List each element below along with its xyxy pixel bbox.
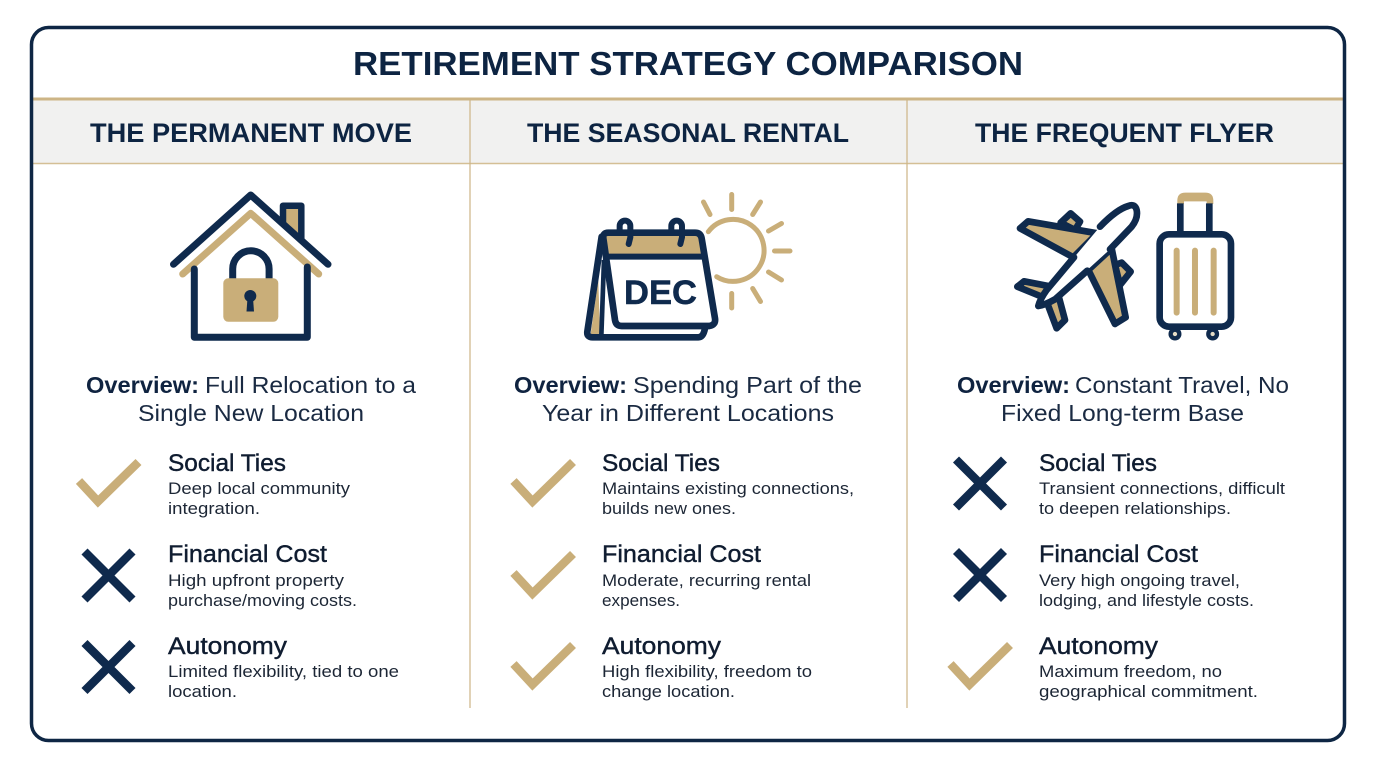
icon: sun bbox=[704, 194, 790, 308]
overview text: Overview: bbox=[86, 372, 199, 398]
column heading: THE FREQUENT FLYER bbox=[975, 118, 1274, 148]
row: financial cost: purchase/moving costs. bbox=[168, 591, 357, 610]
row: social ties: integration. bbox=[168, 499, 260, 518]
panel: the seasonal rental bbox=[514, 118, 862, 701]
row: autonomy: Maximum freedom, no bbox=[1039, 662, 1222, 681]
row: autonomy: High flexibility, freedom to bbox=[602, 662, 812, 681]
row: social ties: to deepen relationships. bbox=[1039, 499, 1231, 518]
overview text: Full Relocation to a bbox=[205, 372, 416, 398]
row: autonomy: Autonomy bbox=[168, 633, 287, 660]
panel: the permanent move bbox=[79, 118, 416, 701]
panel: the frequent flyer bbox=[950, 118, 1289, 701]
overview text: Single New Location bbox=[138, 400, 364, 426]
row: social ties bbox=[956, 450, 1285, 518]
icon: check bbox=[514, 645, 573, 684]
row: autonomy: Autonomy bbox=[1039, 633, 1158, 660]
row: social ties: Social Ties bbox=[168, 450, 286, 477]
calendar month label: DEC bbox=[624, 274, 697, 312]
row: financial cost: Financial Cost bbox=[602, 541, 761, 568]
icon: calendar bbox=[587, 221, 715, 337]
icon: cross bbox=[84, 643, 132, 691]
row: financial cost: Moderate, recurring rental bbox=[602, 571, 811, 590]
row: autonomy bbox=[84, 633, 399, 701]
row: autonomy: Autonomy bbox=[602, 633, 721, 660]
icon: cross bbox=[956, 460, 1004, 508]
row: social ties: Transient connections, difficult bbox=[1039, 479, 1285, 498]
row: autonomy: geographical commitment. bbox=[1039, 682, 1258, 701]
row: financial cost: lodging, and lifestyle costs. bbox=[1039, 591, 1254, 610]
overview text bbox=[86, 372, 416, 426]
row: social ties: Social Ties bbox=[602, 450, 720, 477]
row: financial cost bbox=[956, 541, 1254, 610]
icon: cross bbox=[84, 552, 132, 600]
row: financial cost bbox=[84, 541, 357, 610]
icon: check bbox=[950, 645, 1010, 684]
row: financial cost: Financial Cost bbox=[1039, 541, 1198, 568]
icon: check bbox=[514, 554, 573, 594]
icon: cross bbox=[956, 551, 1004, 599]
row: autonomy: location. bbox=[168, 682, 237, 701]
icon: airplane bbox=[1017, 205, 1137, 328]
row: autonomy bbox=[514, 633, 812, 701]
icon: suitcase bbox=[1160, 193, 1231, 338]
icon: check bbox=[79, 462, 138, 502]
row: financial cost: Very high ongoing travel, bbox=[1039, 571, 1240, 590]
overview text bbox=[514, 372, 862, 426]
column heading: THE SEASONAL RENTAL bbox=[527, 118, 849, 148]
row: autonomy bbox=[950, 633, 1258, 701]
header band background bbox=[33, 100, 1343, 163]
row: autonomy: Limited flexibility, tied to one bbox=[168, 662, 399, 681]
overview text: Overview: bbox=[514, 372, 627, 398]
row: financial cost: expenses. bbox=[602, 591, 680, 610]
row: social ties bbox=[79, 450, 351, 518]
overview text: Spending Part of the bbox=[633, 372, 862, 398]
row: financial cost bbox=[514, 541, 811, 610]
row: social ties: Maintains existing connections, bbox=[602, 479, 854, 498]
row: social ties: builds new ones. bbox=[602, 499, 736, 518]
column heading: THE PERMANENT MOVE bbox=[90, 118, 412, 148]
row: social ties: Deep local community bbox=[168, 479, 351, 498]
overview text: Overview: bbox=[957, 372, 1070, 398]
overview text: Fixed Long-term Base bbox=[1001, 400, 1244, 426]
icon: house with padlock bbox=[174, 195, 328, 337]
overview text: Constant Travel, No bbox=[1075, 372, 1289, 398]
row: social ties: Social Ties bbox=[1039, 450, 1157, 477]
icon: check bbox=[514, 462, 573, 502]
row: financial cost: Financial Cost bbox=[168, 541, 327, 568]
row: social ties bbox=[514, 450, 854, 518]
overview text: Year in Different Locations bbox=[542, 400, 834, 426]
row: autonomy: change location. bbox=[602, 682, 735, 701]
title: RETIREMENT STRATEGY COMPARISON bbox=[353, 45, 1023, 82]
overview text bbox=[957, 372, 1289, 426]
row: financial cost: High upfront property bbox=[168, 571, 345, 590]
